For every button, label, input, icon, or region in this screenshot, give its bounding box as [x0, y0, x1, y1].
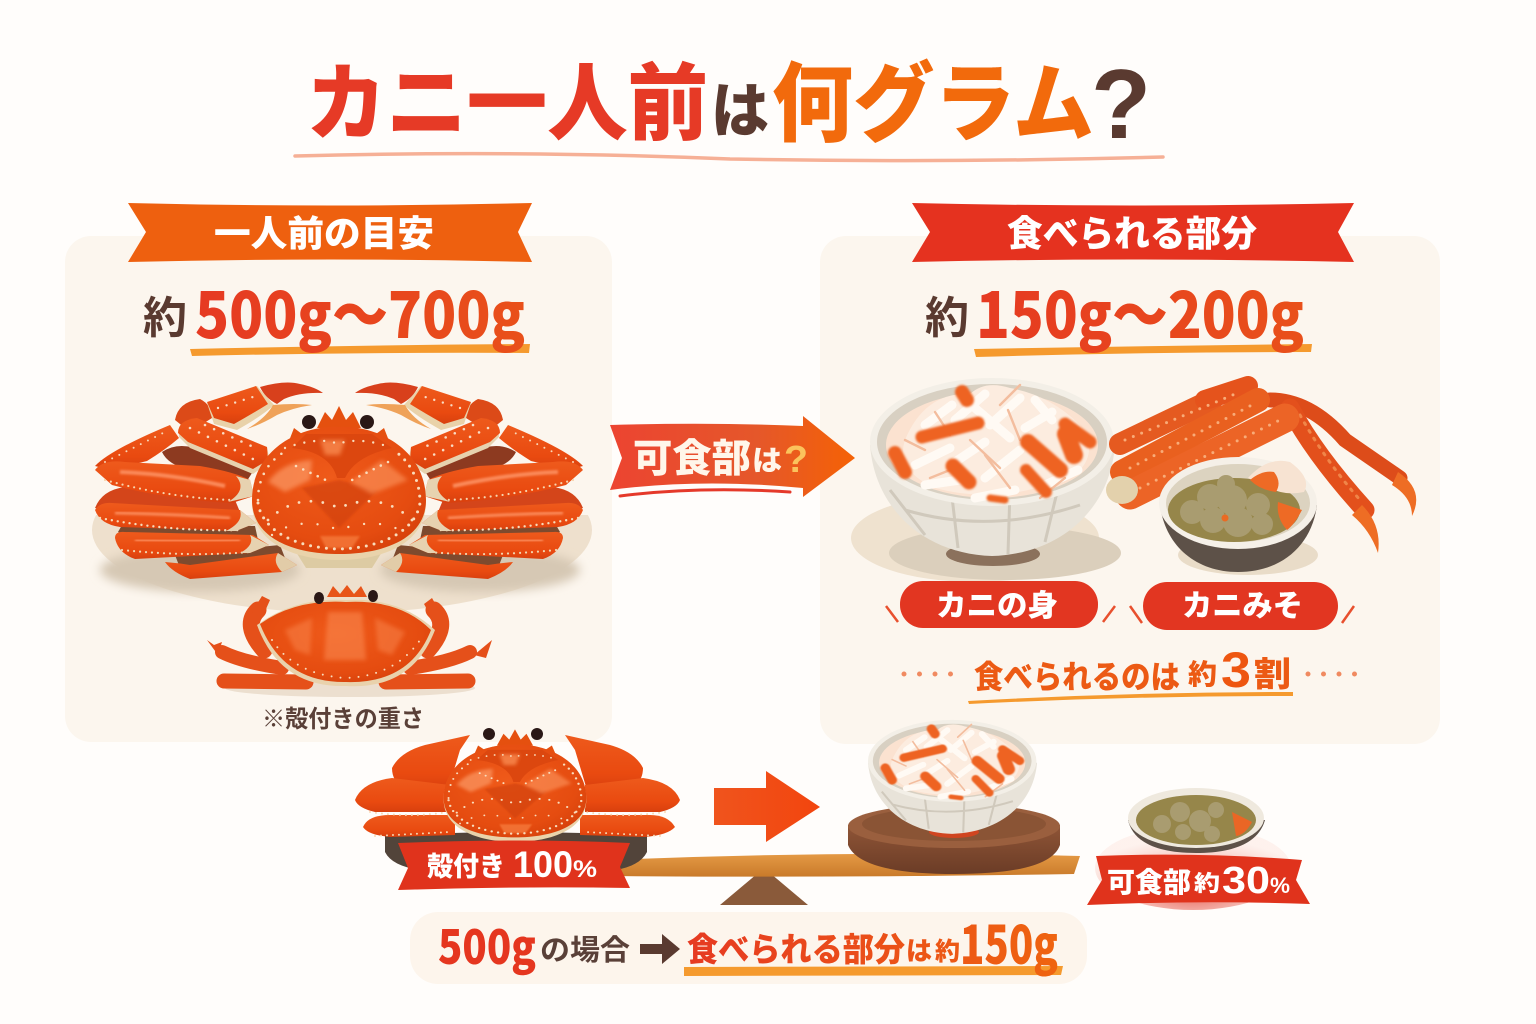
illustration: bowl of crab meat	[851, 378, 1121, 582]
callout: about 30 percent edible: 割	[1254, 647, 1291, 696]
arrow: edible part question: は	[752, 439, 782, 479]
caption: weight with shell: ※殻付きの重さ	[262, 699, 424, 734]
banner: with shell 100 percent: 殻付き	[427, 845, 505, 884]
illustration: bottom whole crab	[355, 728, 680, 842]
amount: 150g to 200g: 150g〜200g	[976, 266, 1304, 357]
callout: 500g example: の場合	[540, 927, 630, 969]
scale: wood plate right	[848, 804, 1060, 874]
banner: serving guideline	[128, 203, 532, 262]
panel: left serving size	[65, 236, 612, 742]
callout: 500g example: 150g	[960, 904, 1058, 980]
label: crab meat: カニの身	[936, 581, 1058, 625]
banner: with shell 100 percent: %	[573, 856, 597, 883]
callout: 500g example: 約	[935, 932, 960, 968]
banner: serving guideline: 一人前の目安	[214, 205, 434, 257]
callout: about 30 percent edible	[904, 642, 1356, 704]
banner: edible part	[912, 203, 1354, 262]
banner: edible about 30 percent	[1087, 855, 1310, 905]
illustration: bottom bowl of crab meat	[868, 720, 1037, 838]
banner: edible about 30 percent: %	[1270, 873, 1290, 898]
banner: with shell 100 percent: 100	[513, 844, 573, 885]
banner: edible about 30 percent: 30	[1222, 860, 1270, 902]
callout: about 30 percent edible: 3	[1221, 642, 1251, 698]
callout: 500g example: 食べられる部分	[687, 923, 905, 971]
callout: 500g example: は	[906, 931, 932, 968]
arrow: edible part question: ?	[784, 439, 808, 481]
illustration: bottom miso dish	[1095, 788, 1291, 910]
callout: about 30 percent edible: 食べられるのは	[974, 652, 1180, 698]
title: 何グラム	[772, 34, 1094, 159]
banner: with shell 100 percent	[398, 840, 630, 890]
panel: right edible portion	[820, 236, 1440, 744]
title: ?	[1091, 49, 1151, 159]
callout: about 30 percent edible: 約	[1188, 653, 1217, 693]
banner: edible part: 食べられる部分	[1007, 205, 1257, 257]
illustration: crab legs	[1106, 386, 1416, 553]
amount: 500g to 700g: 500g〜700g	[195, 266, 525, 357]
illustration: small crab	[207, 585, 492, 697]
scale: wood base left	[385, 832, 647, 870]
big arrow: whole crab to edible portion	[714, 771, 820, 842]
arrow: edible part question	[610, 416, 855, 497]
callout: 500g example	[410, 904, 1087, 984]
arrow: edible part question: 可食部	[633, 428, 751, 484]
title	[295, 34, 1163, 161]
title: は	[711, 63, 769, 150]
amount: 150g to 200g: 約	[925, 282, 969, 346]
banner: edible about 30 percent: 可食部	[1107, 861, 1191, 901]
label: crab miso	[1130, 581, 1354, 630]
amount: 500g to 700g: 約	[143, 282, 187, 346]
illustration: crab miso dish	[1159, 457, 1318, 575]
title: カニ一人前	[306, 37, 708, 158]
illustration: large whole crab	[92, 383, 592, 613]
label: crab meat	[886, 581, 1115, 628]
banner: edible about 30 percent: 約	[1194, 866, 1220, 898]
scale: beam and fulcrum	[610, 854, 1080, 905]
callout: 500g example: 500g	[438, 909, 536, 978]
label: crab miso: カニみそ	[1182, 581, 1303, 625]
